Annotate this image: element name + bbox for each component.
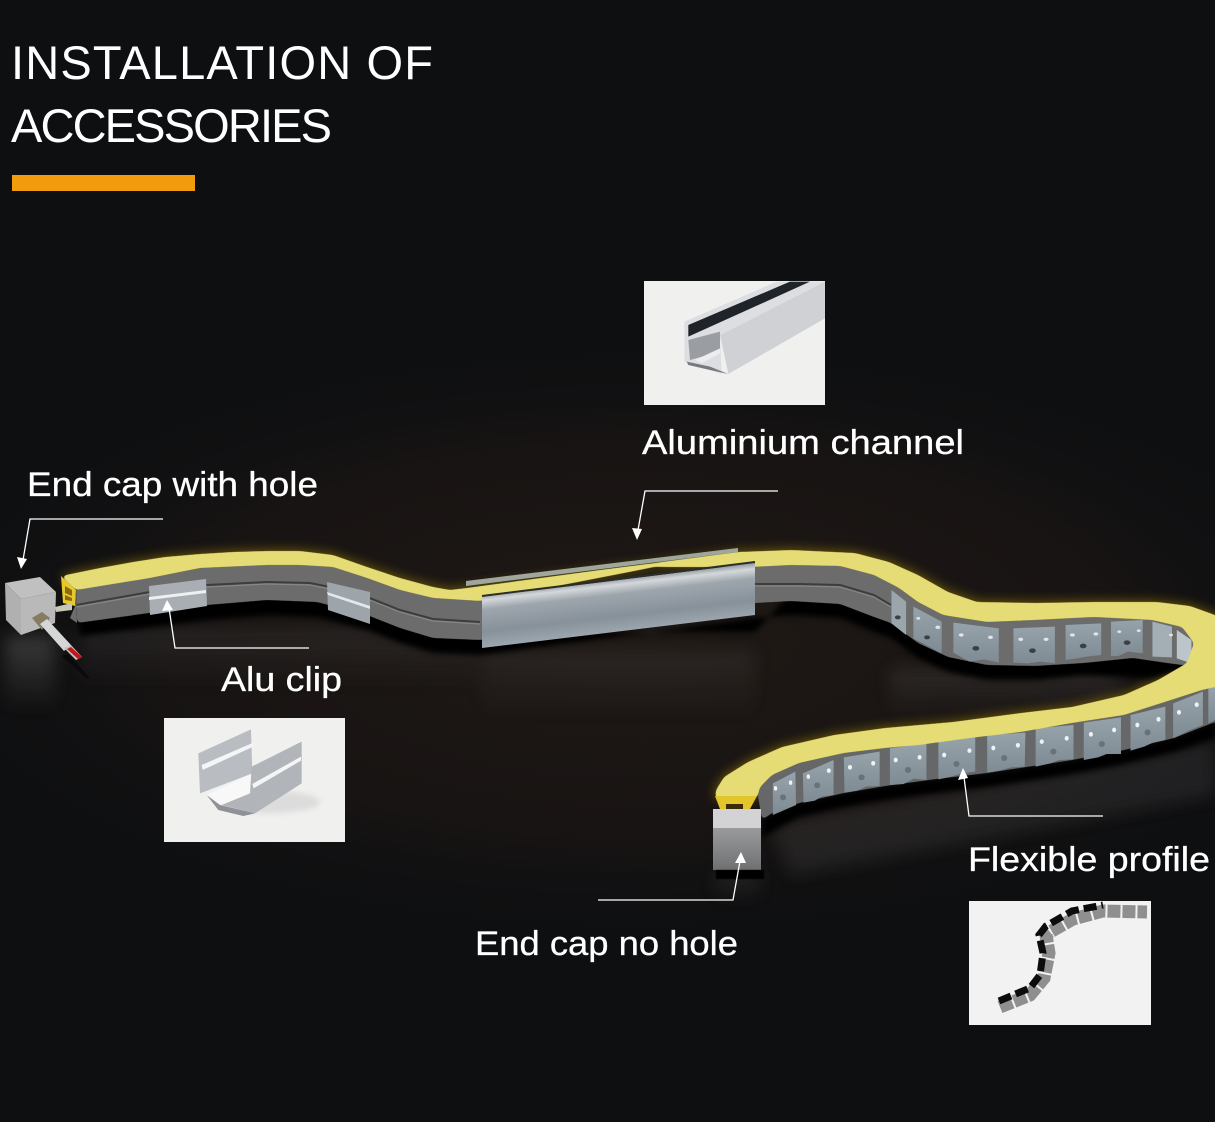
label: flexible profile: Flexible profile: [968, 841, 1210, 879]
end cap with hole: [5, 577, 90, 678]
profile side wall: [76, 565, 1215, 820]
label: aluminium channel: Aluminium channel: [642, 424, 964, 462]
strip glow: [61, 550, 1215, 798]
thumbnail: aluminium channel: [644, 281, 825, 405]
label: alu clip: Alu clip: [221, 661, 342, 699]
aluminium channel cover: [482, 562, 755, 648]
label: end cap no hole: End cap no hole: [475, 925, 738, 963]
title: [11, 36, 433, 152]
arrow: alu clip: [162, 600, 309, 648]
arrow: flexible profile: [958, 768, 1103, 816]
strip end face, right: [715, 796, 757, 809]
thumbnail: flexible profile: [969, 901, 1151, 1025]
arrow: end cap no hole: [598, 852, 746, 900]
thumbnail: aluminium clip: [164, 718, 345, 842]
under-strip shadow: [77, 592, 1190, 680]
label: end cap with hole: End cap with hole: [27, 466, 318, 504]
aluminium channel rod: [466, 548, 738, 586]
neon strip assembly: [5, 548, 1215, 879]
arrow: end cap with hole: [17, 519, 163, 569]
flexible profile plates, upper run: [891, 590, 1191, 663]
alu clip, right: [327, 582, 370, 624]
strip end face, left: [61, 576, 77, 623]
end cap no hole: [713, 809, 764, 879]
alu clip, left: [149, 579, 207, 615]
flexible profile plates, lower run: [773, 686, 1215, 815]
arrow: aluminium channel: [632, 491, 778, 540]
title accent bar: [12, 175, 195, 191]
title: INSTALLATION OF: [11, 36, 433, 89]
yellow light surface: [61, 550, 1215, 798]
title: ACCESSORIES: [11, 99, 332, 152]
floor reflections: [5, 628, 1215, 902]
